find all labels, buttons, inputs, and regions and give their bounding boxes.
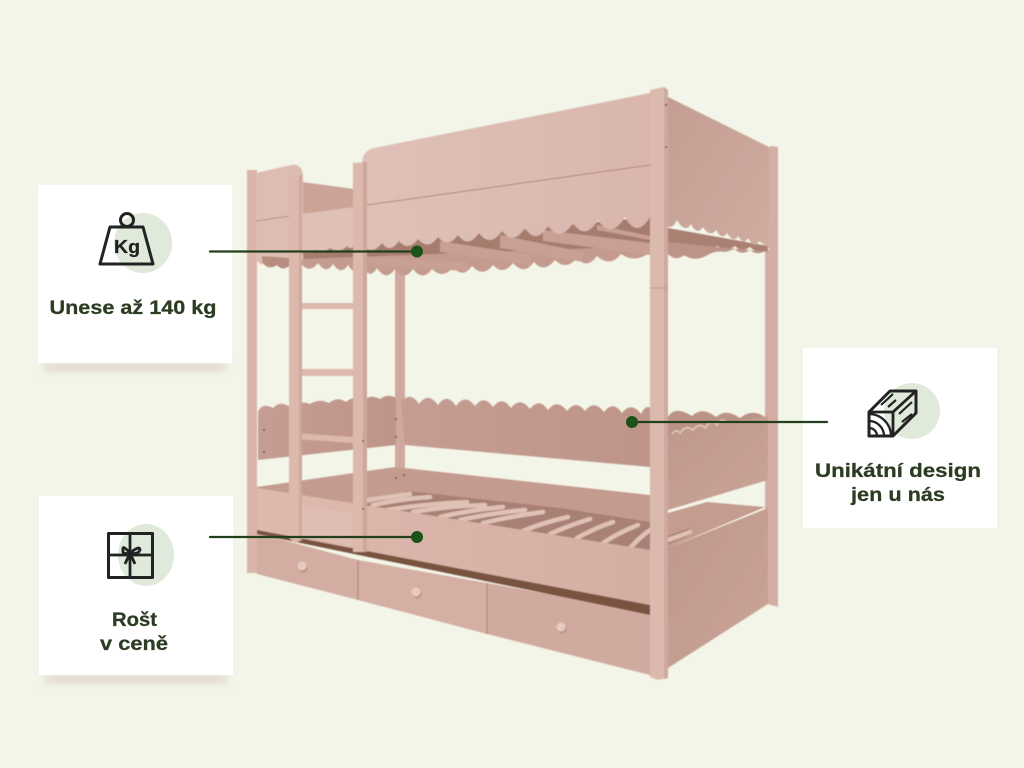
label: slatted base: Rošt	[112, 610, 158, 631]
drawer left	[257, 533, 358, 600]
callout line: unique design	[626, 416, 827, 428]
bed inner wall	[257, 467, 650, 552]
card: slatted base	[39, 496, 233, 683]
lower far head panel behind post	[668, 411, 765, 440]
label: unique design: Unikátní design	[815, 461, 981, 482]
drawer knobs	[298, 562, 566, 634]
bed front rail	[257, 488, 650, 605]
head panel left	[256, 165, 303, 266]
mattress slats	[367, 491, 690, 550]
front corner post	[650, 87, 668, 680]
bunk bed illustration	[247, 87, 778, 680]
drawer middle	[358, 560, 487, 634]
screws	[263, 104, 667, 510]
callout line: load capacity	[210, 246, 423, 258]
upper bunk ladder side: far panel	[302, 182, 354, 216]
drawer right	[487, 583, 650, 675]
lower back panel	[401, 397, 650, 467]
ladder rungs	[295, 303, 354, 511]
underside of upper bunk with beams	[300, 217, 768, 276]
card: slatted base: v ceně	[100, 634, 168, 655]
upper front panel with scallops	[362, 93, 650, 250]
card: unique design	[803, 348, 997, 528]
icon: wooden beam	[869, 383, 940, 439]
back middle post	[395, 270, 405, 475]
icon: weight	[100, 213, 172, 273]
card: unique design: jen u nás	[850, 485, 945, 506]
callout line: slatted base	[210, 531, 423, 543]
bed side rail	[668, 508, 768, 668]
back left post	[247, 170, 257, 573]
drawer gap shadow	[257, 529, 650, 615]
icon: weight: Kg	[114, 237, 140, 257]
label: load capacity: Unese až 140 kg	[50, 298, 216, 319]
back right post	[765, 146, 778, 607]
upper bunk ladder side: guard panel	[302, 207, 354, 253]
ladder left post	[289, 175, 302, 543]
lower side guard panel	[668, 416, 768, 510]
ladder right post	[353, 162, 367, 552]
card: load capacity	[38, 185, 232, 371]
upper side panel with scallops	[668, 97, 769, 248]
icon: gift	[108, 524, 174, 586]
lower head panel left	[258, 396, 396, 460]
